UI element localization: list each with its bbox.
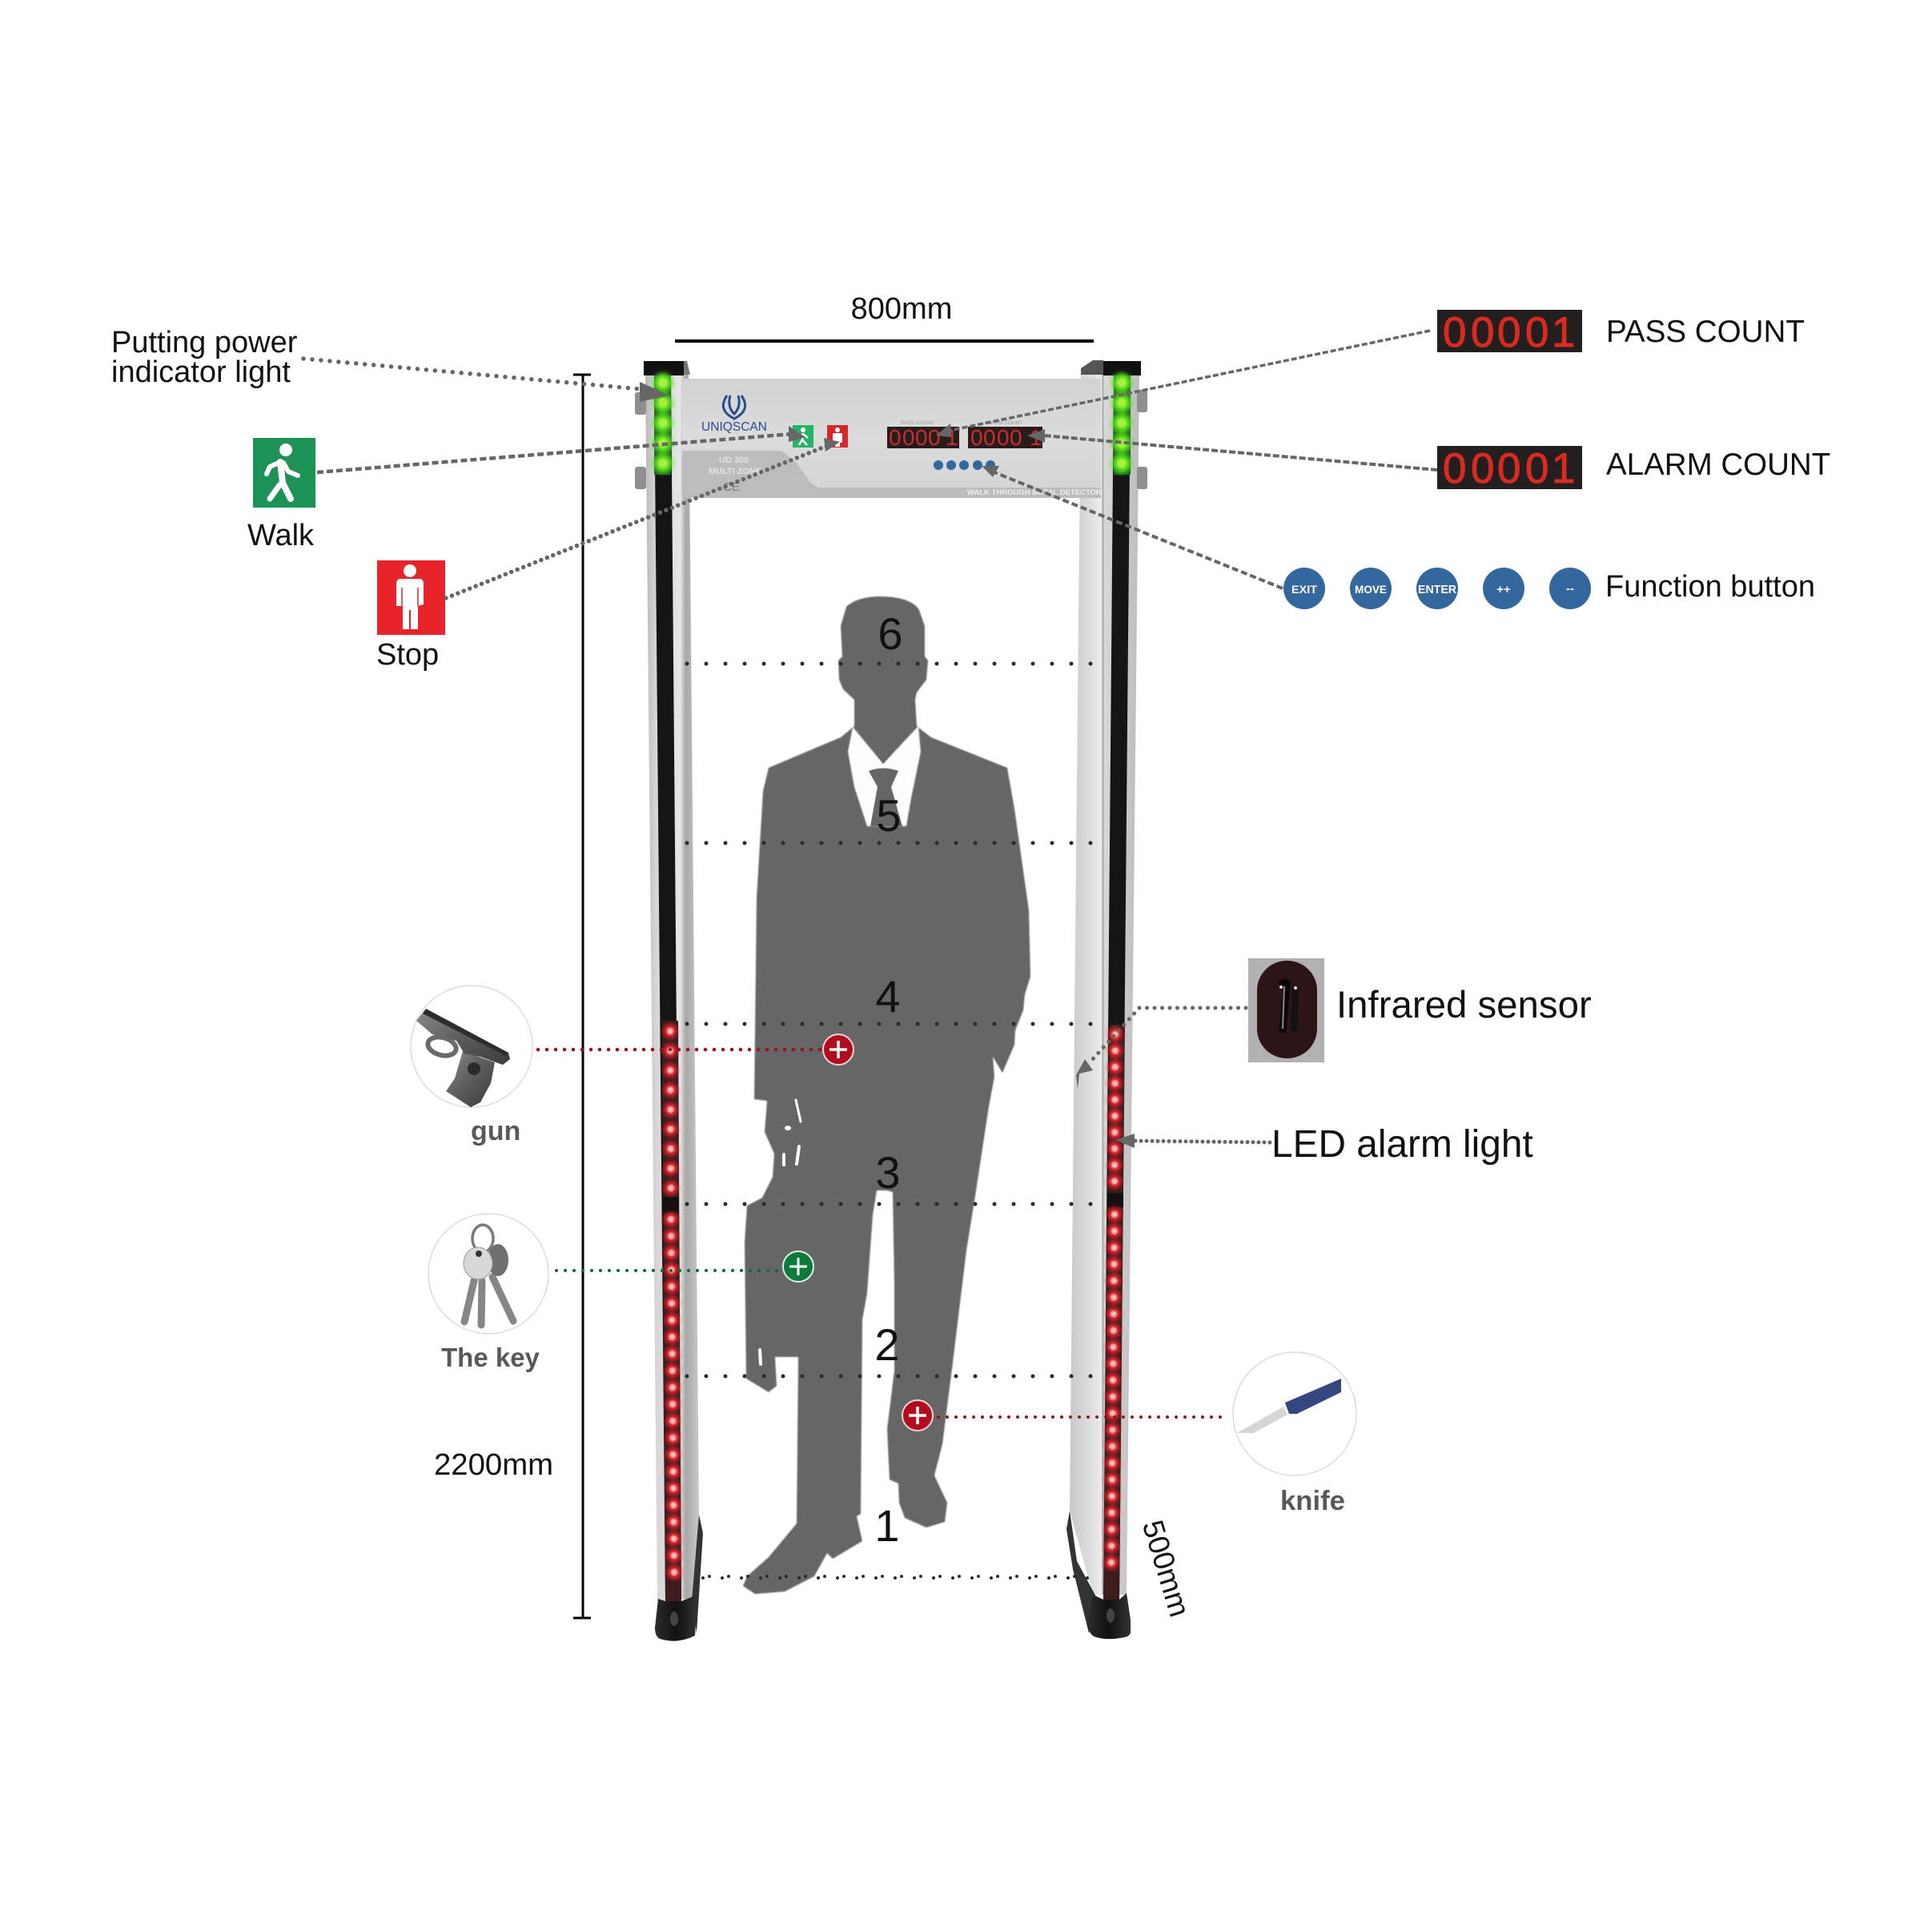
mini pass count display: 00001 (889, 425, 958, 450)
height dimension line (573, 375, 591, 1618)
zone number 6: 6 (878, 608, 903, 659)
right foot (1087, 1593, 1131, 1639)
hand and case highlights (760, 1100, 801, 1364)
label: pass count: PASS COUNT (1606, 315, 1805, 349)
face shadow (854, 725, 917, 764)
arrow: infrared sensor (1076, 1008, 1246, 1089)
alarm count display: 00001 (1443, 445, 1575, 492)
mini function buttons (934, 460, 995, 470)
shirt collar (848, 726, 921, 826)
model label: MULTI ZONE (709, 467, 761, 476)
mini alarm count display: ALARM COUNT (985, 420, 1022, 426)
arrow: walk (317, 426, 805, 472)
button: exit (1283, 568, 1325, 609)
label: knife: knife (1280, 1486, 1345, 1516)
icon: gun (411, 986, 532, 1107)
icon: walk (253, 438, 315, 508)
marker: knife position (902, 1400, 933, 1431)
label: LED alarm light: LED alarm light (1271, 1123, 1533, 1166)
500mm label: 500mm (1136, 1516, 1196, 1620)
product name label: WALK THROUGH METAL DETECTOR (967, 488, 1102, 497)
right green LEDs (1112, 383, 1131, 464)
infrared sensor photo (1248, 958, 1324, 1062)
icon: stop (377, 560, 445, 635)
connector: knife to marker (938, 1415, 1227, 1419)
right foot wedge (1066, 1511, 1099, 1633)
mini alarm count display: 00001 (970, 425, 1042, 450)
model label: CE (723, 480, 740, 494)
label: the key: The key (441, 1343, 540, 1372)
label: walk: Walk (247, 519, 315, 552)
left pillar (645, 375, 703, 1641)
button: move: MOVE (1355, 583, 1387, 596)
pass count display: 00001 (1443, 309, 1575, 356)
marker: gun position (823, 1034, 854, 1065)
button: plus: ++ (1496, 583, 1511, 596)
arrow: stop (446, 438, 840, 598)
tie (869, 769, 902, 826)
arrow: power indicator (303, 359, 669, 402)
label: putting power indicator light: Putting power (111, 326, 298, 359)
arrow: alarm count (1027, 429, 1437, 470)
zone number 5: 5 (876, 790, 902, 841)
label: putting power indicator light: indicator light (111, 355, 291, 389)
top panel (635, 379, 1147, 498)
zone number 2: 2 (874, 1319, 900, 1370)
arrow: LED alarm light (1115, 1134, 1270, 1148)
800mm label: 800mm (851, 292, 952, 326)
person silhouette (743, 596, 1030, 1594)
button: plus (1483, 568, 1524, 609)
model label (709, 456, 761, 494)
button: enter (1416, 568, 1458, 609)
connector: gun to marker (538, 1048, 825, 1051)
icon: keys (428, 1214, 548, 1334)
icon: knife (1233, 1352, 1356, 1475)
arrow: pass count (936, 331, 1430, 437)
arrow: function button (982, 466, 1283, 588)
right red LED alarm lights lower (1111, 1214, 1115, 1564)
left red LED alarm lights lower (671, 1219, 674, 1574)
zone number 3: 3 (875, 1147, 901, 1198)
zone number 1: 1 (874, 1500, 900, 1551)
logo: uniqscan (701, 395, 767, 434)
side knobs (635, 390, 1147, 489)
button: minus (1549, 568, 1591, 609)
label: gun: gun (471, 1116, 520, 1146)
label: function button: Function button (1605, 570, 1815, 604)
left cap and green power lights (644, 361, 690, 475)
right pillar (1066, 375, 1139, 1639)
left red LED alarm lights upper (670, 1031, 671, 1190)
button: exit: EXIT (1291, 583, 1317, 596)
left green LEDs (653, 383, 673, 464)
label: infrared sensor: Infrared sensor (1336, 984, 1592, 1026)
right cap and green power lights (1081, 360, 1141, 475)
width dimension line (675, 339, 1094, 343)
button: enter: ENTER (1418, 584, 1457, 596)
mini stop icon (827, 425, 848, 448)
zone dotted lines (687, 664, 1094, 1578)
mini pass count display: PASS COUNT (901, 420, 934, 426)
left foot wedge (692, 1515, 703, 1633)
mini walk icon (793, 425, 813, 448)
left foot (655, 1595, 697, 1641)
function buttons (1283, 568, 1591, 609)
label: alarm count: ALARM COUNT (1606, 448, 1830, 482)
button: move (1350, 568, 1392, 609)
2200mm label: 2200mm (434, 1447, 553, 1482)
model label: UD 300 (719, 456, 749, 465)
marker: key position (783, 1251, 813, 1282)
logo: uniqscan: UNIQSCAN (701, 420, 767, 434)
label: stop: Stop (376, 638, 439, 672)
zone number 4: 4 (875, 971, 901, 1022)
connector: key to marker (556, 1269, 785, 1272)
button: minus: -- (1566, 582, 1574, 596)
